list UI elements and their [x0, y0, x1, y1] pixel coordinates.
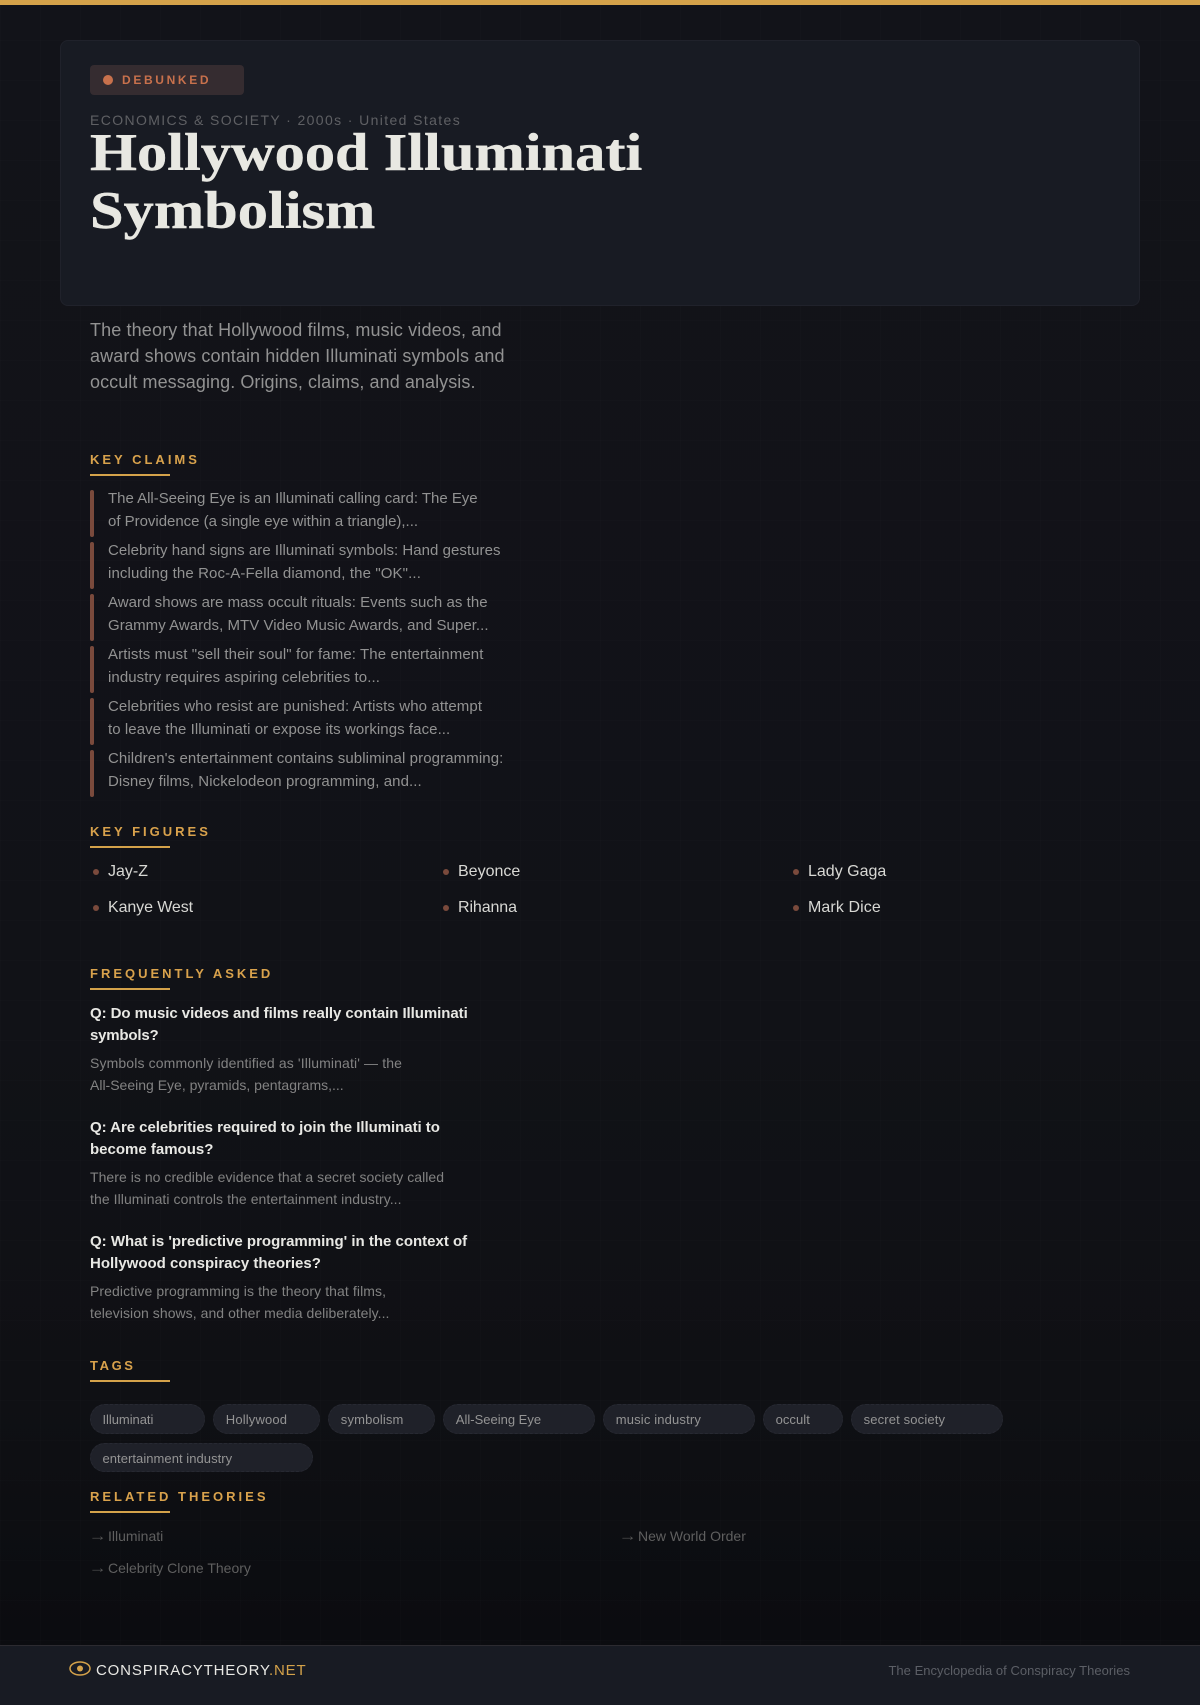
- figure: Lady Gaga: Lady Gaga: [808, 863, 886, 880]
- faq 1: [90, 1005, 468, 1093]
- claim 6: Children's entertainment contains subliminal programming:: [108, 750, 503, 767]
- figure: Jay-Z: Jay-Z: [108, 863, 148, 880]
- heading: key figures: KEY FIGURES: [90, 824, 211, 839]
- title: Hollywood Illuminati: [90, 124, 642, 182]
- faq 2: Q: Are celebrities required to join the Illuminati to: [90, 1119, 440, 1136]
- claim 6: [90, 750, 503, 797]
- claim 2: including the Roc-A-Fella diamond, the "OK"...: [108, 565, 421, 582]
- claim 1: [90, 490, 478, 537]
- faq 1: Symbols commonly identified as 'Illuminati' — the: [90, 1055, 402, 1071]
- top accent bar: [0, 0, 1200, 5]
- link: Illuminati: →: [88, 1528, 107, 1544]
- heading: tags: TAGS: [90, 1358, 136, 1373]
- claim 3: [90, 594, 489, 641]
- faq 3: Hollywood conspiracy theories?: [90, 1255, 321, 1272]
- badge label: DEBUNKED: [122, 73, 211, 87]
- link: Illuminati: Illuminati: [108, 1528, 163, 1544]
- faq 3: [90, 1233, 468, 1321]
- faq 2: There is no credible evidence that a secret society called: [90, 1169, 444, 1185]
- claim 4: [90, 646, 484, 693]
- claim 2: [90, 542, 501, 589]
- tag: Hollywood: Hollywood: [226, 1412, 287, 1427]
- faq 2: [90, 1119, 444, 1207]
- figure: Beyonce: Beyonce: [458, 863, 520, 880]
- tag: entertainment industry: entertainment industry: [102, 1451, 232, 1466]
- link: New World Order: →: [618, 1528, 637, 1544]
- description: award shows contain hidden Illuminati symbols and: [90, 346, 505, 366]
- tag: All-Seeing Eye: All-Seeing Eye: [456, 1412, 541, 1427]
- faq 1: All-Seeing Eye, pyramids, pentagrams,...: [90, 1077, 344, 1093]
- figure: Mark Dice: Mark Dice: [808, 899, 881, 916]
- claim 5: to leave the Illuminati or expose its workings face...: [108, 721, 450, 738]
- link: Celebrity Clone Theory: Celebrity Clone Theory: [108, 1560, 251, 1576]
- claim 3: Award shows are mass occult rituals: Events such as the: [108, 594, 488, 611]
- claim 4: industry requires aspiring celebrities to...: [108, 669, 380, 686]
- claim 5: Celebrities who resist are punished: Artists who attempt: [108, 698, 482, 715]
- tag: All-Seeing Eye: [443, 1404, 595, 1434]
- heading: frequently asked: FREQUENTLY ASKED: [90, 966, 273, 981]
- faq 1: Q: Do music videos and films really contain Illuminati: [90, 1005, 468, 1022]
- tag: occult: occult: [776, 1412, 810, 1427]
- claim 2: Celebrity hand signs are Illuminati symbols: Hand gestures: [108, 542, 501, 559]
- faq 1: symbols?: [90, 1027, 158, 1044]
- claim 6: Disney films, Nickelodeon programming, and...: [108, 773, 422, 790]
- faq 3: Predictive programming is the theory that films,: [90, 1283, 386, 1299]
- claim 1: of Providence (a single eye within a triangle),...: [108, 513, 418, 530]
- link: New World Order: New World Order: [638, 1528, 746, 1544]
- tag: symbolism: [328, 1404, 435, 1434]
- tag: entertainment industry: [90, 1443, 313, 1472]
- faq 3: Q: What is 'predictive programming' in the context of: [90, 1233, 467, 1250]
- tag: Illuminati: [90, 1404, 205, 1434]
- tag: symbolism: symbolism: [341, 1412, 404, 1427]
- description: [90, 320, 505, 392]
- tag: Hollywood: [213, 1404, 320, 1434]
- figure: Kanye West: Kanye West: [108, 899, 193, 916]
- figure: Rihanna: Rihanna: [458, 899, 517, 916]
- icon: status dot: [103, 75, 113, 85]
- tag: Illuminati: Illuminati: [102, 1412, 153, 1427]
- description: The theory that Hollywood films, music videos, and: [90, 320, 502, 340]
- claim 5: [90, 698, 482, 745]
- tag: music industry: [603, 1404, 755, 1434]
- claim 3: Grammy Awards, MTV Video Music Awards, and Super...: [108, 617, 489, 634]
- tag: music industry: music industry: [616, 1412, 701, 1427]
- title: Symbolism: [90, 182, 375, 240]
- heading: related theories: RELATED THEORIES: [90, 1489, 268, 1504]
- faq 3: television shows, and other media deliberately...: [90, 1305, 389, 1321]
- logo wordmark: CONSPIRACYTHEORY.NET: [96, 1662, 306, 1679]
- tag: secret society: [851, 1404, 1003, 1434]
- faq 2: become famous?: [90, 1141, 213, 1158]
- category line: ECONOMICS & SOCIETY · 2000s · United States: [90, 112, 461, 128]
- claim 1: The All-Seeing Eye is an Illuminati calling card: The Eye: [108, 490, 478, 507]
- link: Celebrity Clone Theory: →: [88, 1560, 107, 1576]
- tag: occult: [763, 1404, 843, 1434]
- footer tagline: The Encyclopedia of Conspiracy Theories: [888, 1663, 1130, 1678]
- badge: debunked: [90, 65, 244, 95]
- description: occult messaging. Origins, claims, and analysis.: [90, 372, 476, 392]
- claim 4: Artists must "sell their soul" for fame: The entertainment: [108, 646, 483, 663]
- title: [90, 124, 642, 240]
- faq 2: the Illuminati controls the entertainment industry...: [90, 1191, 402, 1207]
- icon: eye logo: [69, 1661, 91, 1676]
- heading: key claims: KEY CLAIMS: [90, 452, 200, 467]
- tag: secret society: secret society: [864, 1412, 945, 1427]
- panel: header card: [60, 40, 1140, 306]
- panel: footer: [0, 1645, 1200, 1705]
